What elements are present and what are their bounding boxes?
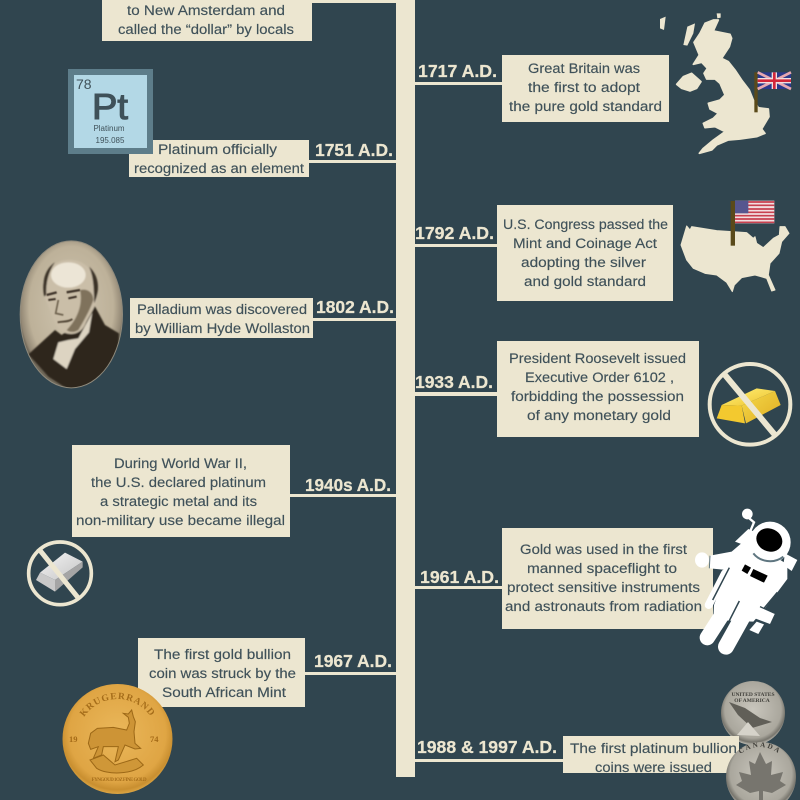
event: dollar in New Amsterdam: [102, 0, 396, 41]
event: dollar in New Amsterdam: called the “dollar” by locals: [118, 22, 294, 38]
event: 1751 platinum recognized: recognized as an element: [134, 161, 304, 177]
icon: platinum periodic table tile: Platinum: [93, 124, 125, 133]
icon: Krugerrand gold coin: FYNGOUD 1OZ FINE GOLD: [92, 778, 147, 783]
event: 1967 first gold bullion coin: The first gold bullion: [154, 647, 291, 663]
event: 1792 Mint and Coinage Act: 1792 A.D.: [415, 223, 494, 243]
event: 1961 first manned spaceflight: 1961 A.D.: [420, 567, 499, 587]
event: 1933 Executive Order 6102: 1933 A.D.: [415, 372, 493, 392]
event: 1933 Executive Order 6102: of any monetary gold: [527, 408, 671, 424]
event: 1717 Great Britain gold standard: Great Britain was: [528, 61, 640, 77]
event: 1751 platinum recognized: Platinum officially: [158, 142, 278, 158]
event: 1961 first manned spaceflight: manned spaceflight to: [527, 561, 677, 577]
event: 1717 Great Britain gold standard: [415, 55, 669, 122]
event: 1792 Mint and Coinage Act: Mint and Coinage Act: [513, 236, 657, 252]
event: 1940s platinum strategic metal: the U.S. declared platinum: [91, 475, 266, 491]
event: 1967 first gold bullion coin: 1967 A.D.: [314, 651, 392, 671]
event: 1802 palladium discovered: [130, 297, 396, 338]
event: 1961 first manned spaceflight: and astronauts from radiation: [505, 599, 702, 615]
event: 1802 palladium discovered: 1802 A.D.: [316, 297, 394, 317]
event: 1717 Great Britain gold standard: the first to adopt: [528, 80, 640, 96]
event: 1988 and 1997 platinum bullion coins: [415, 736, 739, 776]
icon: American platinum coin: [721, 681, 785, 745]
event: 1940s platinum strategic metal: 1940s A.D.: [305, 475, 391, 495]
icon: silver bar prohibited: [29, 542, 91, 605]
event: 1792 Mint and Coinage Act: adopting the silver: [521, 255, 646, 271]
icon: Krugerrand gold coin: [62, 684, 172, 794]
event: 1988 and 1997 platinum bullion coins: The first platinum bullion: [570, 741, 737, 757]
event: 1988 and 1997 platinum bullion coins: 1988 & 1997 A.D.: [417, 737, 557, 757]
icon: gold bar prohibited: [710, 364, 790, 445]
icon: Canadian platinum coin: [726, 742, 796, 800]
event: 1967 first gold bullion coin: coin was struck by the: [149, 666, 296, 682]
event: 1967 first gold bullion coin: [138, 638, 396, 707]
event: 1933 Executive Order 6102: forbidding the possession: [511, 389, 684, 405]
event: 1717 Great Britain gold standard: the pure gold standard: [509, 99, 662, 115]
event: dollar in New Amsterdam: to New Amsterdam and: [127, 3, 285, 19]
event: 1940s platinum strategic metal: non-military use became illegal: [76, 513, 285, 529]
event: 1940s platinum strategic metal: a strategic metal and its: [100, 494, 257, 510]
icon: map of USA with flag: [681, 201, 789, 292]
event: 1802 palladium discovered: by William Hyde Wollaston: [135, 321, 310, 337]
icon: map of Great Britain with flag: [660, 13, 791, 153]
icon: Krugerrand gold coin: 74: [150, 734, 159, 744]
portrait: William Hyde Wollaston: [20, 240, 123, 392]
event: 1988 and 1997 platinum bullion coins: coins were issued: [595, 760, 712, 776]
icon: platinum periodic table tile: 78: [76, 76, 92, 92]
event: 1940s platinum strategic metal: [72, 445, 396, 537]
event: 1751 platinum recognized: [129, 140, 396, 177]
event: 1792 Mint and Coinage Act: U.S. Congress passed the: [503, 217, 668, 233]
icon: American platinum coin: OF AMERICA: [734, 698, 770, 704]
timeline spine: [396, 0, 415, 777]
event: 1717 Great Britain gold standard: 1717 A.D.: [418, 61, 497, 81]
icon: platinum periodic table tile: [68, 69, 153, 154]
event: 1933 Executive Order 6102: President Roosevelt issued: [509, 351, 686, 367]
event: 1961 first manned spaceflight: [415, 528, 713, 629]
event: 1961 first manned spaceflight: protect sensitive instruments: [507, 580, 700, 596]
icon: astronaut: [695, 509, 797, 647]
event: 1933 Executive Order 6102: [415, 341, 699, 437]
event: 1751 platinum recognized: 1751 A.D.: [315, 140, 393, 160]
event: 1961 first manned spaceflight: Gold was used in the first: [520, 542, 687, 558]
event: 1802 palladium discovered: Palladium was discovered: [137, 302, 307, 318]
event: 1933 Executive Order 6102: Executive Order 6102 ,: [525, 370, 674, 386]
event: 1940s platinum strategic metal: During World War II,: [114, 456, 247, 472]
icon: platinum periodic table tile: 195.085: [96, 136, 125, 145]
event: 1967 first gold bullion coin: South African Mint: [162, 685, 286, 701]
icon: platinum periodic table tile: Pt: [92, 86, 128, 127]
icon: Krugerrand gold coin: KRUGERRAND: [79, 692, 154, 717]
icon: Krugerrand gold coin: 19: [69, 734, 78, 744]
event: 1792 Mint and Coinage Act: [415, 205, 673, 301]
icon: American platinum coin: UNITED STATES: [731, 692, 775, 698]
icon: Canadian platinum coin: CANADA: [738, 742, 779, 753]
event: 1792 Mint and Coinage Act: and gold standard: [524, 274, 646, 290]
